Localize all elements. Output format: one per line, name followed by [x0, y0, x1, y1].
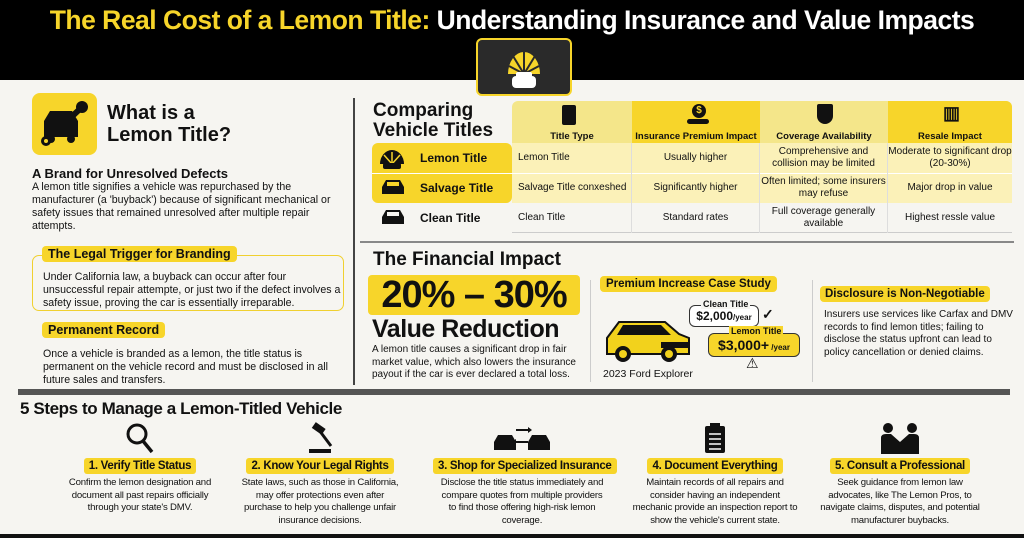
- subheading: A Brand for Unresolved Defects: [32, 166, 228, 181]
- panel: comparing titles table: Clean Title: [518, 212, 565, 223]
- text block: A lemon title signifies a vehicle was repurchased by the manufacturer (a 'buyback') because of significant mechanical or safety issues that remained unresolved after multiple repair attempts.: [32, 181, 330, 232]
- icon: yellow SUV: [606, 321, 690, 362]
- panel: comparing titles table: Significantly higher: [654, 182, 737, 193]
- icon: car wrench: [32, 93, 97, 155]
- panel: comparing titles table: Resale Impact: [918, 131, 982, 142]
- heading: What is a: [107, 102, 195, 124]
- panel: comparing titles table: Salvage Title: [420, 181, 493, 195]
- step 2: [242, 422, 398, 526]
- icon: clean car: [382, 210, 404, 224]
- panel: financial impact: Value Reduction: [372, 315, 559, 343]
- step 2: State laws, such as those in California, may offer protections even after purchase to help you challenge unfair insurance decisions.: [242, 477, 398, 526]
- step 3: Disclose the title status immediately and compare quotes from multiple providers to find those offering high-risk lemon coverage.: [441, 477, 603, 526]
- step 4: [633, 423, 798, 526]
- heading: Lemon Title?: [107, 124, 231, 146]
- step 2: 2. Know Your Legal Rights: [251, 460, 389, 472]
- step 1: [69, 424, 211, 513]
- callout: legal trigger: [32, 255, 344, 311]
- panel: financial impact: [368, 249, 580, 380]
- callout: lemon: $3,000+ /year: [718, 337, 790, 353]
- step 5: [820, 423, 980, 526]
- panel: case study: 2023 Ford Explorer: [603, 368, 693, 380]
- heading: 5 steps: 5 Steps to Manage a Lemon-Titled Vehicle: [20, 399, 342, 418]
- panel: comparing titles table: Moderate to significant drop (20-30%): [888, 146, 1012, 169]
- icon: lemon wheel: [380, 150, 404, 169]
- label: legal trigger: The Legal Trigger for Branding: [48, 247, 231, 261]
- panel: case study: Lemon Title: [731, 326, 781, 336]
- callout: clean: $2,000/year: [696, 309, 752, 323]
- panel: disclosure: [820, 286, 1013, 358]
- heading: Comparing: [373, 100, 473, 121]
- callout: clean: [689, 305, 759, 327]
- heading: [373, 100, 493, 141]
- panel: comparing titles table: Insurance Premium Impact: [635, 131, 757, 142]
- panel: case study: [600, 276, 800, 380]
- text block: Insurers use services like Carfax and DMV records to find lemon titles; failing to disclose the status upfront can lead to policy cancellation or denied claims.: [824, 309, 1013, 358]
- step 1: 1. Verify Title Status: [89, 460, 191, 472]
- panel: comparing titles table: $: [696, 105, 702, 116]
- callout: legal trigger: Under California law, a buyback can occur after four unsuccessful repair attempte, or just two if the defect involves a safety issue, proving the car is essentially irreparable.: [43, 271, 340, 309]
- callout: lemon: [708, 333, 800, 357]
- label: Premium Increase Case Study: [606, 278, 771, 290]
- steps: [69, 422, 980, 526]
- panel: comparing titles table: Lemon Title: [518, 152, 570, 163]
- panel: comparing titles table: Standard rates: [663, 212, 728, 223]
- panel: what is a lemon title: [32, 93, 344, 386]
- label: [600, 276, 777, 292]
- heading: [107, 102, 231, 146]
- panel: comparing titles table: Full coverage generally available: [772, 206, 875, 229]
- panel: case study: ⚠: [746, 355, 759, 371]
- step 3: [433, 427, 617, 526]
- step 5: 5. Consult a Professional: [835, 460, 965, 472]
- header bar: [0, 0, 1024, 80]
- panel: case study: ✓: [762, 306, 774, 322]
- label: Disclosure is Non-Negotiable: [825, 288, 985, 300]
- step 5: Seek guidance from lemon law advocates, like The Lemon Pros, to navigate claims, disputes, and potential manufacturer buybacks.: [820, 477, 980, 526]
- panel: comparing titles table: Clean Title: [420, 211, 480, 225]
- label: permanent record: Permanent Record: [48, 323, 159, 337]
- big stat: 20% – 30%: [381, 274, 567, 316]
- panel: comparing titles table: Comprehensive and collision may be limited: [772, 146, 875, 169]
- heading: The Financial Impact: [373, 249, 561, 270]
- step 4: Maintain records of all repairs and consider having an independent mechanic provide an inspection report to show the vehicle's current state.: [633, 477, 797, 526]
- panel: comparing titles table: Usually higher: [664, 152, 727, 163]
- text block: permanent: Once a vehicle is branded as a lemon, the title status is permanent on the vehicle record and must be disclosed in all future sales and transfers.: [43, 348, 328, 386]
- panel: comparing titles table: Salvage Title conxeshed: [518, 182, 626, 193]
- panel: comparing titles table: Lemon Title: [420, 151, 487, 165]
- panel: comparing titles table: [372, 100, 1012, 233]
- title: The Real Cost of a Lemon Title: Understanding Insurance and Value Impacts: [50, 5, 974, 35]
- panel: comparing titles table: Highest ressle value: [905, 212, 995, 223]
- panel: comparing titles table: Coverage Availability: [776, 131, 872, 142]
- text block: A lemon title causes a significant drop in fair market value, which also lowers the insurance payout if the car is ever declared a total loss.: [372, 344, 576, 380]
- panel: comparing titles table: Major drop in value: [907, 182, 993, 193]
- heading: Vehicle Titles: [373, 120, 493, 141]
- panel: comparing titles table: Title Type: [550, 131, 594, 142]
- header icons: [562, 105, 576, 125]
- panel: comparing titles table: Often limited; some insurers may refuse: [761, 176, 886, 199]
- table header: [512, 101, 1012, 143]
- panel: case study: Clean Title: [703, 299, 748, 309]
- icon: lemon car logo: [476, 38, 572, 96]
- panel: comparing titles table: ▥: [943, 103, 960, 123]
- step 1: Confirm the lemon designation and document all past repairs officially through your state's DMV.: [69, 477, 211, 513]
- rows: [372, 143, 512, 203]
- step 3: 3. Shop for Specialized Insurance: [438, 460, 612, 472]
- icon: salvage car: [382, 180, 404, 194]
- step 4: 4. Document Everything: [652, 460, 778, 472]
